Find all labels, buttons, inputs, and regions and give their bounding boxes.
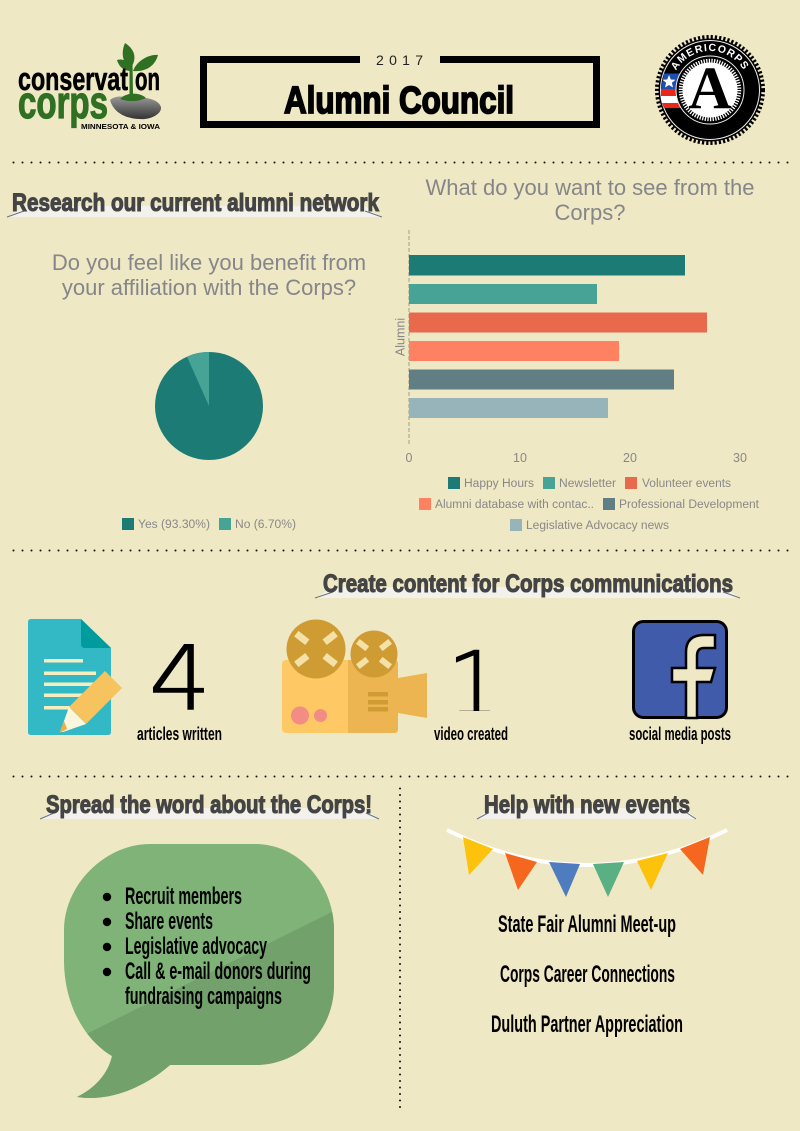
seal letter: A [688,55,732,121]
logo: Conservation Corps: conservat [18,61,128,97]
axis labels: Alumni [394,318,408,356]
pie legend: Yes (93.30%) [138,519,210,531]
logo: Conservation Corps: on [135,61,160,97]
stat: 1 video: video created [434,724,508,744]
pie legend [122,518,296,531]
bullet list: fundraising campaigns [125,983,282,1010]
event list: State Fair Alumni Meet-up [498,911,676,938]
bullet list: Call & e-mail donors during [125,958,311,985]
bar chart title: What do you want to see from the [426,175,754,200]
bar chart title: Corps? [555,200,625,225]
pie chart title: Do you feel like you benefit from [52,250,366,275]
logo leaves and stem [117,43,158,95]
pie legend: No (6.70%) [235,519,296,531]
bar legend: Newsletter [559,478,616,490]
bars [409,255,707,418]
stat: 1 video: 1 [447,633,503,736]
dotted divider 2 [14,550,792,552]
axis labels: 0 [406,451,413,465]
logo: Conservation Corps: MINNESOTA & IOWA [81,122,161,131]
heading: new events: Help with new events [484,791,690,819]
stat: 4 articles: 4 [149,627,211,730]
label: social media posts: social media posts [629,724,731,744]
title: Alumni Council [284,80,514,122]
stat: 4 articles [137,627,222,744]
title box [204,52,596,124]
stat: 4 articles: articles written [137,724,222,744]
logo hand [110,94,161,119]
axis labels: 10 [513,451,527,465]
bar legend: Professional Development [619,499,760,511]
bar chart title [426,175,754,225]
axis labels: 20 [623,451,637,465]
bullet list: Legislative advocacy [125,933,267,960]
bullet list [103,883,311,1010]
dotted vertical divider [399,788,401,1108]
seal flag [661,74,685,108]
logo: AmeriCorps seal [655,35,765,145]
icon: facebook [634,622,726,718]
event list [491,911,683,1038]
bullet list: Recruit members [125,883,242,910]
dotted divider 3 [14,776,792,778]
bar legend: Happy Hours [464,478,534,490]
year: 2017 [376,52,423,68]
bar chart [394,230,747,465]
bar legend [419,477,760,532]
bar legend: Alumni database with contac.. [435,499,594,511]
event list: Corps Career Connections [500,961,675,988]
axis labels: 30 [733,451,747,465]
dotted divider 1 [14,162,792,164]
logo: Conservation Corps: corps [18,77,108,128]
bar legend: Volunteer events [642,478,731,490]
speech bubble [64,844,334,1098]
logo: Conservation Corps [18,43,161,131]
pie chart [155,352,263,460]
icon: document and pencil [28,619,122,735]
bullet list: Share events [125,908,213,935]
pie chart title: your affiliation with the Corps? [62,275,356,300]
heading: spread the word: Spread the word about the Corps! [46,791,372,819]
bunting [447,830,727,897]
seal name: AMERICORPS [672,44,748,70]
bar legend: Legislative Advocacy news [526,520,669,532]
axis labels [394,318,747,465]
icon: film projector [282,620,427,733]
stat: 1 video [434,650,508,740]
heading: research: Research our current alumni network [12,189,379,217]
pie chart title [52,250,366,300]
